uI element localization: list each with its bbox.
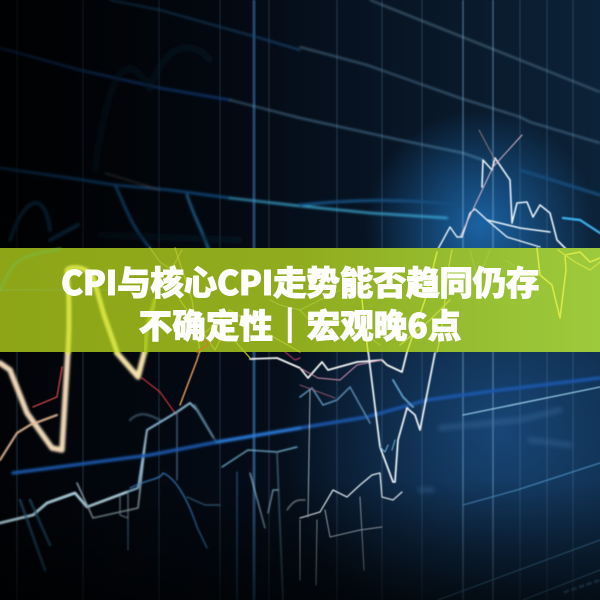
- lower left series: [0, 403, 305, 600]
- band faint lines: [0, 248, 600, 358]
- blue bright streak: [13, 378, 600, 473]
- title line 1: CPI与核心CPI走势能否趋同仍存: [61, 256, 539, 305]
- lower left thick: [0, 350, 145, 450]
- title line 2: 不确定性｜宏观晚6点: [139, 299, 461, 348]
- white V and lower right series: [300, 350, 435, 537]
- main peaks: [438, 130, 567, 250]
